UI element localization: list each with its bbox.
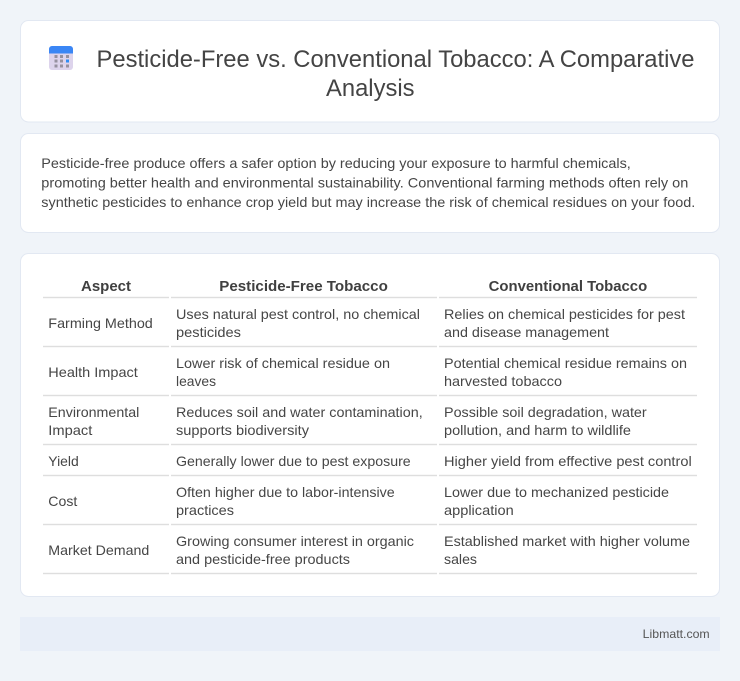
row: farming method: and disease management <box>444 324 609 340</box>
row: health impact: Potential chemical residue remains on <box>444 355 687 371</box>
row: farming method: Uses natural pest control, no chemical <box>176 306 420 322</box>
row: cost: application <box>444 502 514 518</box>
table header row <box>43 279 697 298</box>
row: farming method: Relies on chemical pesticides for pest <box>444 306 685 322</box>
row: farming method: Farming Method <box>48 315 153 331</box>
row: health impact: Health Impact <box>48 364 138 380</box>
intro text: Pesticide-free produce offers a safer option by reducing your exposure to harmful chemicals, <box>41 155 631 171</box>
intro text: synthetic pesticides to enhance crop yield but may increase the risk of chemical residues on your food. <box>41 194 695 210</box>
footer <box>20 617 720 651</box>
row: cost: practices <box>176 502 234 518</box>
row: environmental impact: Impact <box>48 422 92 438</box>
row: health impact: harvested tobacco <box>444 373 562 389</box>
row: market demand: and pesticide-free products <box>176 551 350 567</box>
row: environmental impact: Possible soil degradation, water <box>444 404 647 420</box>
row: health impact: leaves <box>176 373 216 389</box>
row: yield <box>43 453 697 476</box>
intro text: promoting better health and environmental sustainability. Conventional farming methods often rely on <box>41 174 688 190</box>
row: market demand: Established market with higher volume <box>444 533 690 549</box>
row: environmental impact: Environmental <box>48 404 139 420</box>
row: farming method: pesticides <box>176 324 241 340</box>
row: cost: Cost <box>48 493 77 509</box>
icon: calendar <box>49 46 73 70</box>
intro text <box>41 155 695 210</box>
table header row: Conventional Tobacco <box>489 279 647 295</box>
panel: comparison table <box>20 254 720 596</box>
row: cost <box>43 484 697 525</box>
title <box>96 46 694 102</box>
row: environmental impact: supports biodiversity <box>176 422 309 438</box>
row: cost: Often higher due to labor-intensive <box>176 484 395 500</box>
row: market demand: Market Demand <box>48 542 149 558</box>
row: environmental impact: pollution, and harm to wildlife <box>444 422 631 438</box>
title: Pesticide-Free vs. Conventional Tobacco: A Comparative <box>96 46 694 73</box>
panel: header <box>20 20 720 122</box>
row: farming method <box>43 306 697 347</box>
row: market demand <box>43 533 697 574</box>
title: Analysis <box>326 75 414 102</box>
row: cost: Lower due to mechanized pesticide <box>444 484 669 500</box>
row: market demand: sales <box>444 551 477 567</box>
row: environmental impact <box>43 404 697 445</box>
row: health impact: Lower risk of chemical residue on <box>176 355 390 371</box>
row: health impact <box>43 355 697 396</box>
row: yield: Generally lower due to pest exposure <box>176 453 411 469</box>
panel: introduction <box>20 134 720 232</box>
table header row: Pesticide-Free Tobacco <box>219 279 388 295</box>
row: yield: Yield <box>48 453 79 469</box>
row: market demand: Growing consumer interest in organic <box>176 533 414 549</box>
row: environmental impact: Reduces soil and water contamination, <box>176 404 423 420</box>
table header row: Aspect <box>81 279 131 295</box>
footer: Libmatt.com <box>643 627 710 641</box>
row: yield: Higher yield from effective pest control <box>444 453 692 469</box>
